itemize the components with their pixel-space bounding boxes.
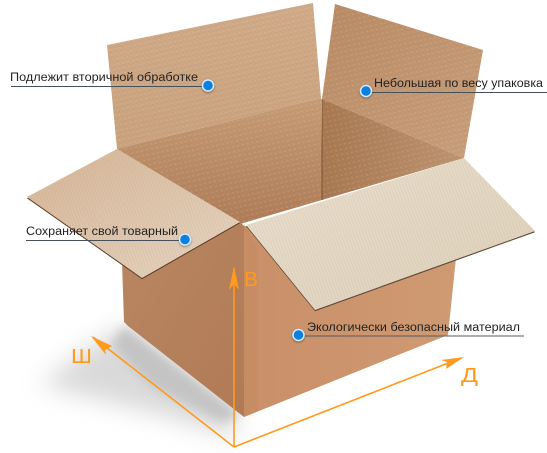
callout: eco material: Экологически безопасный материал xyxy=(307,322,520,334)
front right face xyxy=(244,226,456,417)
callout: keeps presentation: Сохраняет свой товарный xyxy=(26,226,178,238)
label: В: В xyxy=(244,269,258,291)
callout: light weight: Небольшая по весу упаковка xyxy=(374,78,544,90)
callout: secondary processing: Подлежит вторичной обработке xyxy=(10,72,198,84)
front left flap xyxy=(27,149,240,279)
dimension arrows xyxy=(91,266,464,447)
front left face xyxy=(122,222,244,417)
arrow: height xyxy=(229,266,239,447)
callout: eco material xyxy=(293,322,524,340)
inner left wall xyxy=(117,98,322,224)
floor shadow xyxy=(40,326,240,436)
back left flap xyxy=(107,3,321,149)
callout: keeps presentation xyxy=(26,226,190,245)
callout: secondary processing xyxy=(10,72,214,91)
back right flap xyxy=(322,4,483,158)
arrow: width xyxy=(91,336,234,447)
label: Ш: Ш xyxy=(71,346,92,368)
arrow: length xyxy=(234,357,464,447)
corner fold xyxy=(244,224,258,417)
callout: light weight xyxy=(360,78,547,96)
front right flap xyxy=(246,158,535,311)
label: Д: Д xyxy=(461,365,479,387)
inner right wall xyxy=(322,99,464,200)
